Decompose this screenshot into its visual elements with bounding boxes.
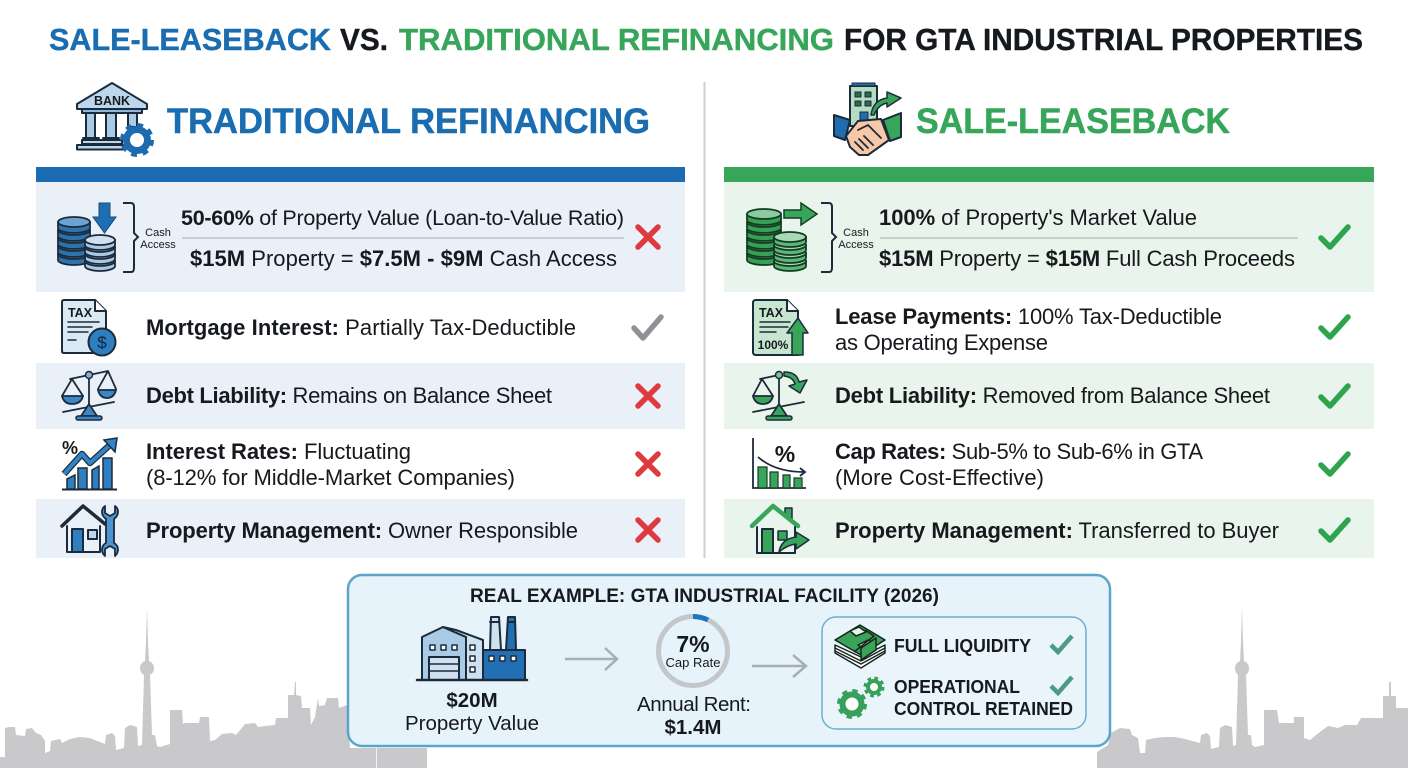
icon: house with transfer arrow: [752, 506, 809, 553]
row: interest rates: [62, 438, 658, 490]
text: property management: Property Management: Transferred to Buyer: [835, 518, 1279, 543]
label: full liquidity: FULL LIQUIDITY: [894, 636, 1031, 656]
header bar: [724, 167, 1374, 182]
icon: coins with down arrow: [58, 203, 116, 271]
row: debt liability: [724, 363, 1374, 429]
cap rate gauge: 7%: [676, 631, 710, 657]
title: [49, 23, 1363, 57]
row: mortgage interest: [62, 300, 661, 356]
text: lease payments: Lease Payments: 100% Tax-Deductible: [835, 304, 1222, 329]
icon: balance with curved arrow: [753, 372, 807, 420]
label: property value: [405, 689, 539, 735]
label: annual rent: [637, 693, 751, 739]
row: cap rates: [753, 438, 1348, 490]
label: annual rent: Annual Rent:: [637, 693, 751, 716]
icon: balance scales: [62, 371, 116, 420]
text: property management: Property Management: Owner Responsible: [146, 518, 578, 543]
icon: tax document with arrow: [753, 300, 808, 355]
icon: tax document with arrow: TAX: [759, 306, 784, 320]
label: cash access: Cash: [843, 227, 869, 239]
icon: falling bars with percent: %: [775, 441, 795, 467]
icon: building and handshake: [834, 83, 901, 155]
icon: gears: [840, 678, 882, 716]
panel: sale-leaseback: [724, 83, 1374, 558]
text: loan to value: 50-60% of Property Value (Loan-to-Value Ratio): [181, 206, 624, 230]
panel: traditional refinancing: [36, 83, 685, 558]
text: interest rates: (8-12% for Middle-Market Companies): [146, 465, 515, 490]
bracket: [123, 203, 138, 272]
label: annual rent: $1.4M: [665, 716, 721, 739]
icon: cross: [638, 520, 658, 540]
row: property management: [724, 499, 1374, 558]
heading: sale-leaseback: SALE-LEASEBACK: [916, 102, 1230, 141]
text: cap rates: [835, 439, 1203, 490]
icon: tax document: TAX: [68, 306, 93, 320]
icon: check: [1321, 386, 1348, 406]
label: property value: $20M: [446, 689, 498, 712]
title: TRADITIONAL REFINANCING: [399, 23, 834, 57]
text: cap rates: (More Cost-Effective): [835, 465, 1044, 490]
heading: traditional refinancing: TRADITIONAL REFINANCING: [167, 102, 650, 141]
label: cash access: [140, 227, 176, 251]
label: operational control retained: [894, 677, 1073, 719]
text: cash access amount: $15M Property = $7.5M - $9M Cash Access: [190, 246, 617, 271]
title: FOR GTA INDUSTRIAL PROPERTIES: [844, 23, 1363, 57]
title: VS.: [340, 23, 388, 57]
cap rate gauge: [658, 616, 728, 686]
icon: rising chart with percent: %: [62, 438, 78, 458]
label: operational control retained: CONTROL RETAINED: [894, 699, 1073, 719]
icon: bank with gear: BANK: [94, 94, 130, 108]
text: market value: 100% of Property's Market Value: [879, 205, 1197, 230]
icon: check: [1051, 636, 1072, 652]
row: property management: [36, 499, 685, 558]
text: cap rates: Cap Rates: Sub-5% to Sub-6% in GTA: [835, 439, 1203, 464]
arrow: [565, 648, 617, 670]
icon: check: [1321, 520, 1348, 540]
row: debt liability: [36, 363, 685, 429]
text: interest rates: Interest Rates: Fluctuating: [146, 439, 411, 464]
title: SALE-LEASEBACK: [49, 23, 331, 57]
label: cash access: Cash: [145, 227, 171, 239]
icon: falling bars with percent: [753, 438, 806, 488]
heading: real example: REAL EXAMPLE: GTA INDUSTRIAL FACILITY (2026): [470, 585, 939, 607]
icon: check: [1321, 454, 1348, 474]
label: property value: Property Value: [405, 712, 539, 735]
icon: tax document: [62, 300, 116, 356]
icon: money stack: [835, 625, 885, 668]
label: cash access: Access: [838, 239, 874, 251]
icon: cross: [638, 454, 658, 474]
icon: bank with gear: [77, 83, 152, 154]
icon: coins with right arrow: [747, 203, 817, 271]
text: debt liability: Debt Liability: Removed from Balance Sheet: [835, 383, 1270, 408]
icon: check: [1321, 227, 1348, 247]
skyline: right: [1097, 607, 1408, 768]
row: cash access: [724, 182, 1374, 292]
icon: factory: [417, 617, 527, 680]
icon: check: [1051, 677, 1072, 693]
arrow: [752, 655, 806, 677]
text: full cash proceeds: $15M Property = $15M Full Cash Proceeds: [879, 246, 1295, 271]
cap rate gauge: Cap Rate: [666, 655, 720, 670]
icon: cross: [638, 227, 658, 247]
icon: cross: [638, 386, 658, 406]
outcomes box: [822, 617, 1086, 729]
icon: check: [1321, 317, 1348, 337]
header bar: [36, 167, 685, 182]
skyline: left: [0, 607, 427, 768]
text: mortgage interest: Mortgage Interest: Partially Tax-Deductible: [146, 315, 576, 340]
label: cash access: [838, 227, 874, 251]
icon: tax document with arrow: 100%: [758, 338, 789, 352]
text: debt liability: Debt Liability: Remains on Balance Sheet: [146, 383, 552, 408]
bracket: [821, 203, 836, 272]
icon: rising chart with percent: [62, 438, 117, 490]
text: lease payments: [835, 304, 1222, 355]
label: cash access: Access: [140, 239, 176, 251]
text: interest rates: [146, 439, 515, 490]
icon: tax document: $: [97, 333, 107, 352]
panel: real example: [348, 575, 1110, 746]
text: lease payments: as Operating Expense: [835, 330, 1048, 355]
icon: gray check: [634, 317, 661, 338]
row: cash access: [36, 182, 685, 292]
label: operational control retained: OPERATIONAL: [894, 677, 1020, 697]
row: lease payments: [753, 300, 1348, 355]
icon: house and wrench: [62, 506, 118, 556]
